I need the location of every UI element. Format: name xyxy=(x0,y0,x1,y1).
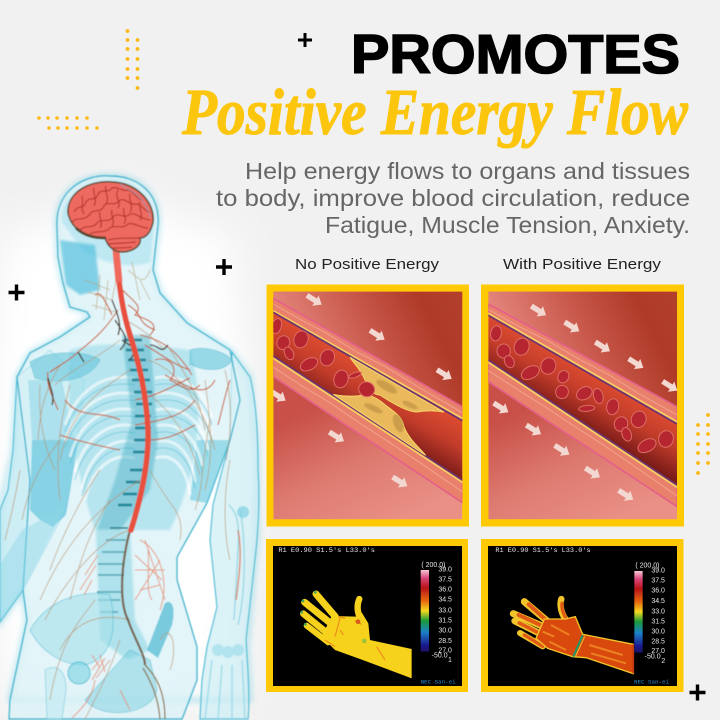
decorative dots top vertical xyxy=(126,29,139,90)
temperature scale: 2 xyxy=(661,658,665,665)
temperature scale: 39.0 xyxy=(438,567,452,574)
vessel background xyxy=(273,292,462,519)
temperature scale xyxy=(634,563,665,665)
temperature scale: 36.0 xyxy=(438,587,452,594)
description text: Fatigue, Muscle Tension, Anxiety. xyxy=(325,212,690,238)
cyan glow around silhouette xyxy=(0,176,257,700)
panel frame xyxy=(481,284,684,526)
red blood cells xyxy=(270,317,377,399)
vessel walls xyxy=(488,304,677,424)
panel: thermal image warm xyxy=(481,539,684,692)
vessel lumen xyxy=(273,312,462,480)
temperature scale: 37.5 xyxy=(438,577,452,584)
temperature scale: 28.5 xyxy=(651,639,665,646)
panel frame xyxy=(266,539,468,692)
left forearm xyxy=(0,507,65,622)
neck nerves web xyxy=(85,262,150,320)
red blood cells xyxy=(489,325,675,456)
temperature scale: 1 xyxy=(448,657,452,664)
column label: no positive energy: No Positive Energy xyxy=(295,256,440,273)
upper left arm dark xyxy=(30,440,78,527)
brain xyxy=(68,182,153,252)
vertebrae xyxy=(118,340,152,505)
temperature scale: ( 200.0) xyxy=(635,563,659,570)
right arm xyxy=(200,352,259,719)
lumbar and pelvis xyxy=(96,530,150,660)
head cyan rim xyxy=(62,180,154,265)
plaque xyxy=(350,357,444,412)
thermal hand cool xyxy=(300,591,412,678)
description text: to body, improve blood circulation, reduce xyxy=(216,185,690,211)
temperature scale: 28.5 xyxy=(438,638,452,645)
ribs xyxy=(65,377,212,500)
temperature scale: 33.0 xyxy=(651,608,665,615)
temperature scale: 39.0 xyxy=(651,567,665,574)
temperature scale: 27.0 xyxy=(438,647,452,654)
left arm xyxy=(0,350,84,622)
spine column tint xyxy=(97,335,158,530)
temperature scale: 36.0 xyxy=(651,587,665,594)
temperature scale: -50.0 xyxy=(432,653,448,660)
temperature scale: 31.5 xyxy=(651,618,665,625)
vessel background xyxy=(488,292,677,519)
temperature scale: 33.0 xyxy=(438,607,452,614)
decorative dots top horizontal xyxy=(37,116,99,130)
flow arrows xyxy=(490,301,681,505)
panel: vessel clear xyxy=(481,284,684,526)
thermal brand text: NEC San-ei xyxy=(634,679,670,686)
nerve branches: dark xyxy=(48,300,168,719)
panel frame xyxy=(266,284,469,526)
vessel lumen xyxy=(488,315,677,485)
temperature scale: ( 200.0) xyxy=(421,562,445,569)
temperature scale: 37.5 xyxy=(651,577,665,584)
flow arrows xyxy=(268,290,455,491)
description text: Help energy flows to organs and tissues xyxy=(245,158,690,184)
torso and head outline xyxy=(9,176,240,719)
shoulder blades xyxy=(30,348,232,381)
body illustration xyxy=(0,176,259,719)
title: promotes: PROMOTES xyxy=(351,23,680,85)
spinal cord xyxy=(116,248,148,530)
temperature scale: 34.5 xyxy=(651,598,665,605)
temperature scale: 31.5 xyxy=(438,617,452,624)
nerve branches: light xyxy=(5,320,230,719)
nerve branches: orange xyxy=(48,285,230,450)
thermal brand text: NEC San-ei xyxy=(421,679,456,686)
description text xyxy=(216,158,690,238)
chest tint xyxy=(69,344,198,530)
panel: thermal image cool xyxy=(266,539,468,692)
temperature scale xyxy=(421,562,452,664)
thermal header text: R1 E0.90 S1.5's L33.0's xyxy=(278,546,375,554)
column label: with positive energy: With Positive Energy xyxy=(503,256,662,273)
upper left arm shoulder xyxy=(28,380,74,440)
upper right arm dark xyxy=(190,440,230,503)
temperature scale: 30.0 xyxy=(651,628,665,635)
temperature scale: 30.0 xyxy=(438,627,452,634)
temperature scale: 27.0 xyxy=(651,648,665,655)
abdomen nerves xyxy=(72,530,240,718)
vessel walls xyxy=(273,298,462,422)
temperature scale: 34.5 xyxy=(438,597,452,604)
thermal hand warm xyxy=(513,599,633,674)
right forearm bones and hand xyxy=(229,505,244,625)
panel: vessel blocked xyxy=(266,284,469,526)
panel frame xyxy=(481,539,684,692)
thermal header text: R1 E0.90 S1.5's L33.0's xyxy=(495,546,591,554)
decorative dots right xyxy=(696,413,710,475)
temperature scale: -50.0 xyxy=(645,653,661,660)
face tint xyxy=(60,240,100,295)
